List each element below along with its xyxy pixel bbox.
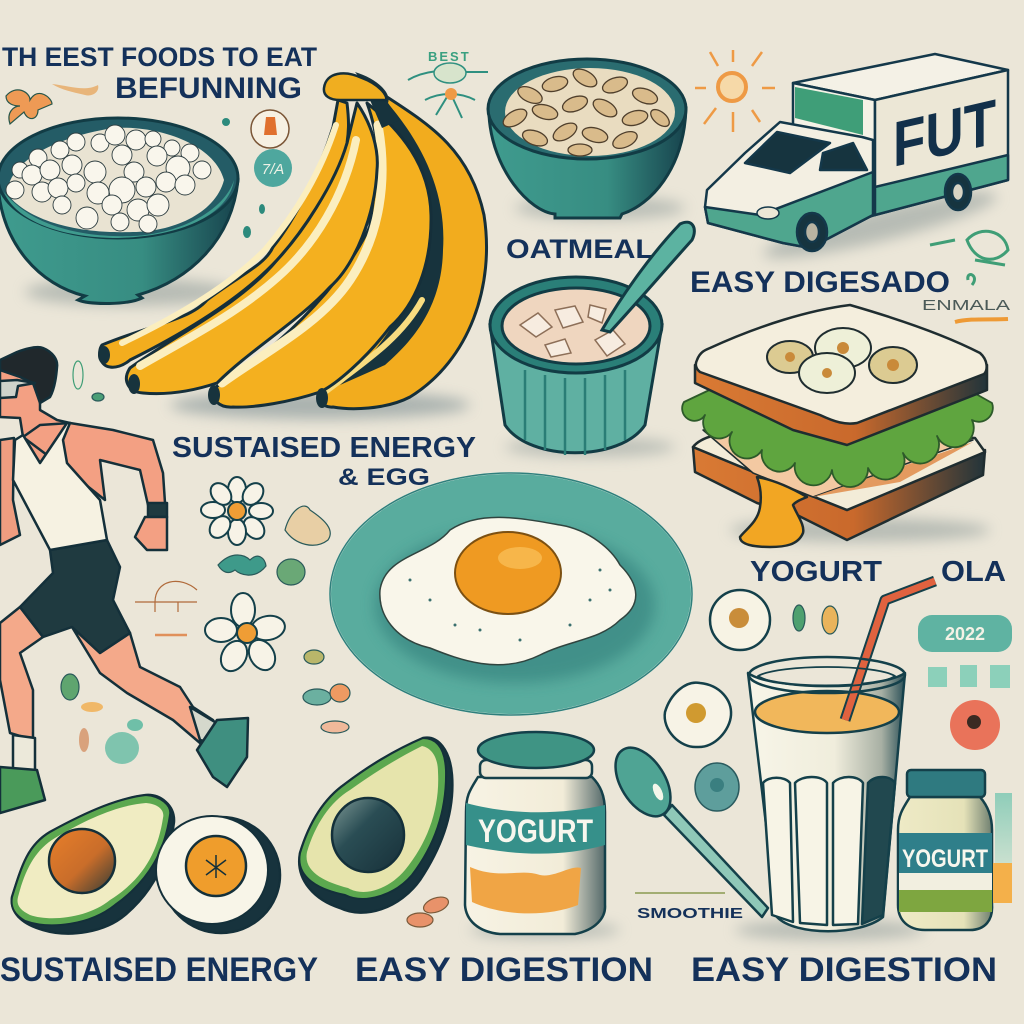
icon: fried egg on plate (330, 473, 692, 715)
badge: 7A: 7/A (262, 161, 284, 178)
icon: spoon (604, 738, 768, 917)
icon: oatmeal bowl (488, 59, 686, 220)
title: TH EEST FOODS TO EAT (2, 42, 317, 72)
icon: avocado half with dark pit (299, 738, 452, 913)
label: oatmeal: OATMEAL (506, 234, 654, 264)
doodle: orange stroke under enmala (955, 319, 1008, 322)
icon: small flower near banana (251, 110, 289, 148)
label: sustained energy and egg: & EGG (338, 464, 430, 491)
badge: 7A (254, 149, 292, 187)
doodle: green leaves by truck (930, 231, 1008, 285)
icon: rice bowl (0, 118, 238, 306)
label: easy digesado: EASY DIGESADO (690, 266, 950, 299)
icon: seeds (407, 894, 451, 927)
bottom label: sustained energy: SUSTAISED ENERGY (0, 951, 318, 989)
label: sustained energy and egg: SUSTAISED ENERGY (172, 432, 476, 464)
icon: red flower (950, 700, 1000, 750)
side tabs: right edge colour bars (993, 793, 1012, 903)
icon: yogurt jar (465, 732, 620, 938)
doodle: best label with sprig: BEST (428, 49, 471, 64)
title: BEFUNNING (115, 72, 302, 105)
icon: oatmeal ramekin with spoon (490, 222, 694, 457)
divider: rule above smoothie label (635, 892, 725, 894)
icon: banana sandwich (682, 305, 993, 547)
jar label: small yogurt: YOGURT (902, 845, 988, 873)
badge: year tag: 2022 (945, 624, 985, 644)
bottom label: easy digestion right: EASY DIGESTION (691, 951, 997, 989)
icon: white flower small (665, 683, 731, 747)
label: yogurt ola: OLA (941, 556, 1006, 588)
label: yogurt ola (750, 556, 1006, 588)
label: yogurt ola: YOGURT (750, 556, 882, 588)
doodle: best label with sprig (408, 49, 488, 118)
icon: avocado half with orange pit (12, 795, 174, 934)
icon: tiny sprigs (793, 605, 838, 634)
label: sustained energy and egg (172, 432, 476, 491)
icon: daisy upper (201, 477, 273, 545)
icon: bunch of bananas (98, 72, 487, 419)
jar label: yogurt: YOGURT (478, 813, 593, 849)
icon: butterfly doodle top left (6, 90, 52, 124)
icon: banana slice (710, 590, 770, 650)
label: enmala: ENMALA (922, 297, 1010, 314)
badge: year tag (918, 615, 1012, 688)
icon: runner (0, 347, 248, 813)
icon: egg half (156, 816, 280, 933)
icon: delivery truck (705, 54, 1008, 270)
label: smoothie: SMOOTHIE (637, 905, 743, 922)
truck lettering: FUT (893, 85, 996, 181)
doodle: teal dots (222, 118, 265, 238)
doodle: smear near title (52, 84, 98, 95)
icon: small yogurt jar (898, 770, 992, 930)
icon: teal berry (695, 763, 739, 811)
icon: daisy lower (205, 593, 287, 676)
doodles: small leaves around runner (61, 361, 350, 764)
title (2, 42, 317, 105)
icon: smoothie glass (735, 581, 935, 940)
icon: sun (695, 50, 775, 132)
bottom label: easy digestion center: EASY DIGESTION (355, 951, 653, 989)
